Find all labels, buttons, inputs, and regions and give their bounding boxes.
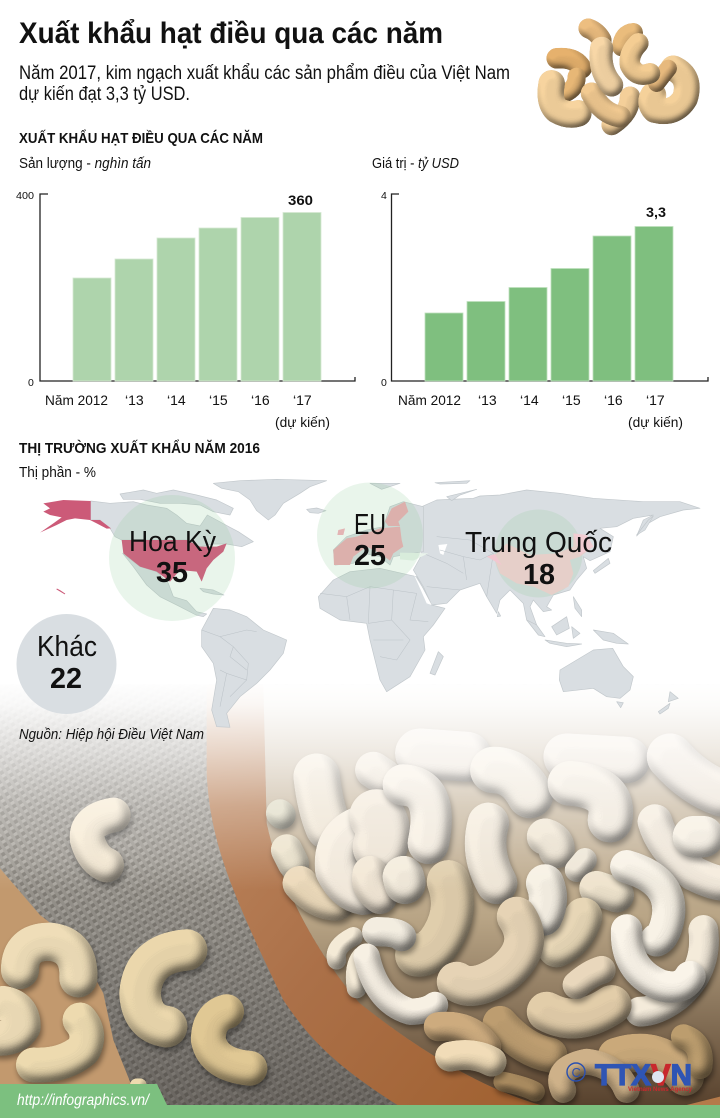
label: China: Trung Quốc xyxy=(465,527,612,559)
label: United States: Hoa Kỳ xyxy=(129,526,216,558)
intro text: Năm 2017, kim ngạch xuất khẩu các sản phẩm điều của Việt Nam xyxy=(19,63,510,84)
label: United States: 35 xyxy=(156,557,188,589)
label: EU: EU xyxy=(354,509,386,541)
bubble: other markets xyxy=(16,614,116,714)
bar chart: value: ‘17 xyxy=(646,392,665,408)
bar chart: volume: ‘17 xyxy=(293,392,312,408)
footer bar with url: http://infographics.vn/ xyxy=(17,1092,151,1109)
bar chart: value: 4 xyxy=(381,190,387,202)
logo: TTXVN: Vietnam News Agency xyxy=(628,1087,693,1093)
title: Xuất khẩu hạt điều qua các năm xyxy=(19,17,443,50)
bar chart: value: 3,3 xyxy=(646,205,667,220)
chart subtitle: volume: Sản lượng - nghìn tấn xyxy=(19,156,151,172)
label: China xyxy=(465,527,612,591)
label: China: 18 xyxy=(523,559,555,591)
chart subtitle: value: Giá trị - tỷ USD xyxy=(372,156,459,172)
logo: TTXVN: TTXVN xyxy=(595,1059,692,1092)
bar chart: value: ‘15 xyxy=(562,392,581,408)
heading: export by year: XUẤT KHẨU HẠT ĐIỀU QUA CÁC NĂM xyxy=(19,129,263,147)
bar chart: volume: (dự kiến) xyxy=(275,414,330,430)
bar chart: volume: 400 xyxy=(16,190,34,202)
source note: Nguồn: Hiệp hội Điều Việt Nam xyxy=(19,727,204,743)
bar chart: volume: Năm 2012 xyxy=(45,392,108,408)
bar chart: value xyxy=(381,190,708,430)
label: United States xyxy=(129,526,216,589)
footer bar with url xyxy=(0,1084,720,1118)
bar chart: volume: ‘13 xyxy=(125,392,144,408)
label: EU xyxy=(354,509,386,572)
label: EU: 25 xyxy=(354,540,386,572)
bar chart: value: 0 xyxy=(381,377,387,389)
bar chart: value: Năm 2012 xyxy=(398,392,461,408)
bar chart: volume: 0 xyxy=(28,377,34,389)
bubble halos behind the markets xyxy=(109,482,582,621)
icon: cashew cluster xyxy=(551,28,687,125)
bar chart: volume: ‘14 xyxy=(167,392,186,408)
intro text xyxy=(19,63,510,105)
bubble: other markets: Khác xyxy=(37,631,97,663)
bar chart: value: ‘14 xyxy=(520,392,539,408)
background photo: bowl of cashews xyxy=(0,680,720,1110)
bar chart: volume: ‘16 xyxy=(251,392,270,408)
bar chart: value: (dự kiến) xyxy=(628,414,683,430)
bar chart: value: ‘13 xyxy=(478,392,497,408)
bar chart: volume xyxy=(16,190,355,430)
bubble: other markets: 22 xyxy=(50,663,82,695)
world map xyxy=(91,479,700,727)
bar chart: value: ‘16 xyxy=(604,392,623,408)
market share subtitle: Thị phần - % xyxy=(19,465,96,481)
highlighted countries xyxy=(40,500,593,595)
intro text: dự kiến đạt 3,3 tỷ USD. xyxy=(19,84,190,105)
bar chart: volume: ‘15 xyxy=(209,392,228,408)
logo: TTXVN: C xyxy=(572,1065,581,1080)
bar chart: volume: 360 xyxy=(288,193,313,208)
heading: export markets: THỊ TRƯỜNG XUẤT KHẨU NĂM 2016 xyxy=(19,439,260,457)
